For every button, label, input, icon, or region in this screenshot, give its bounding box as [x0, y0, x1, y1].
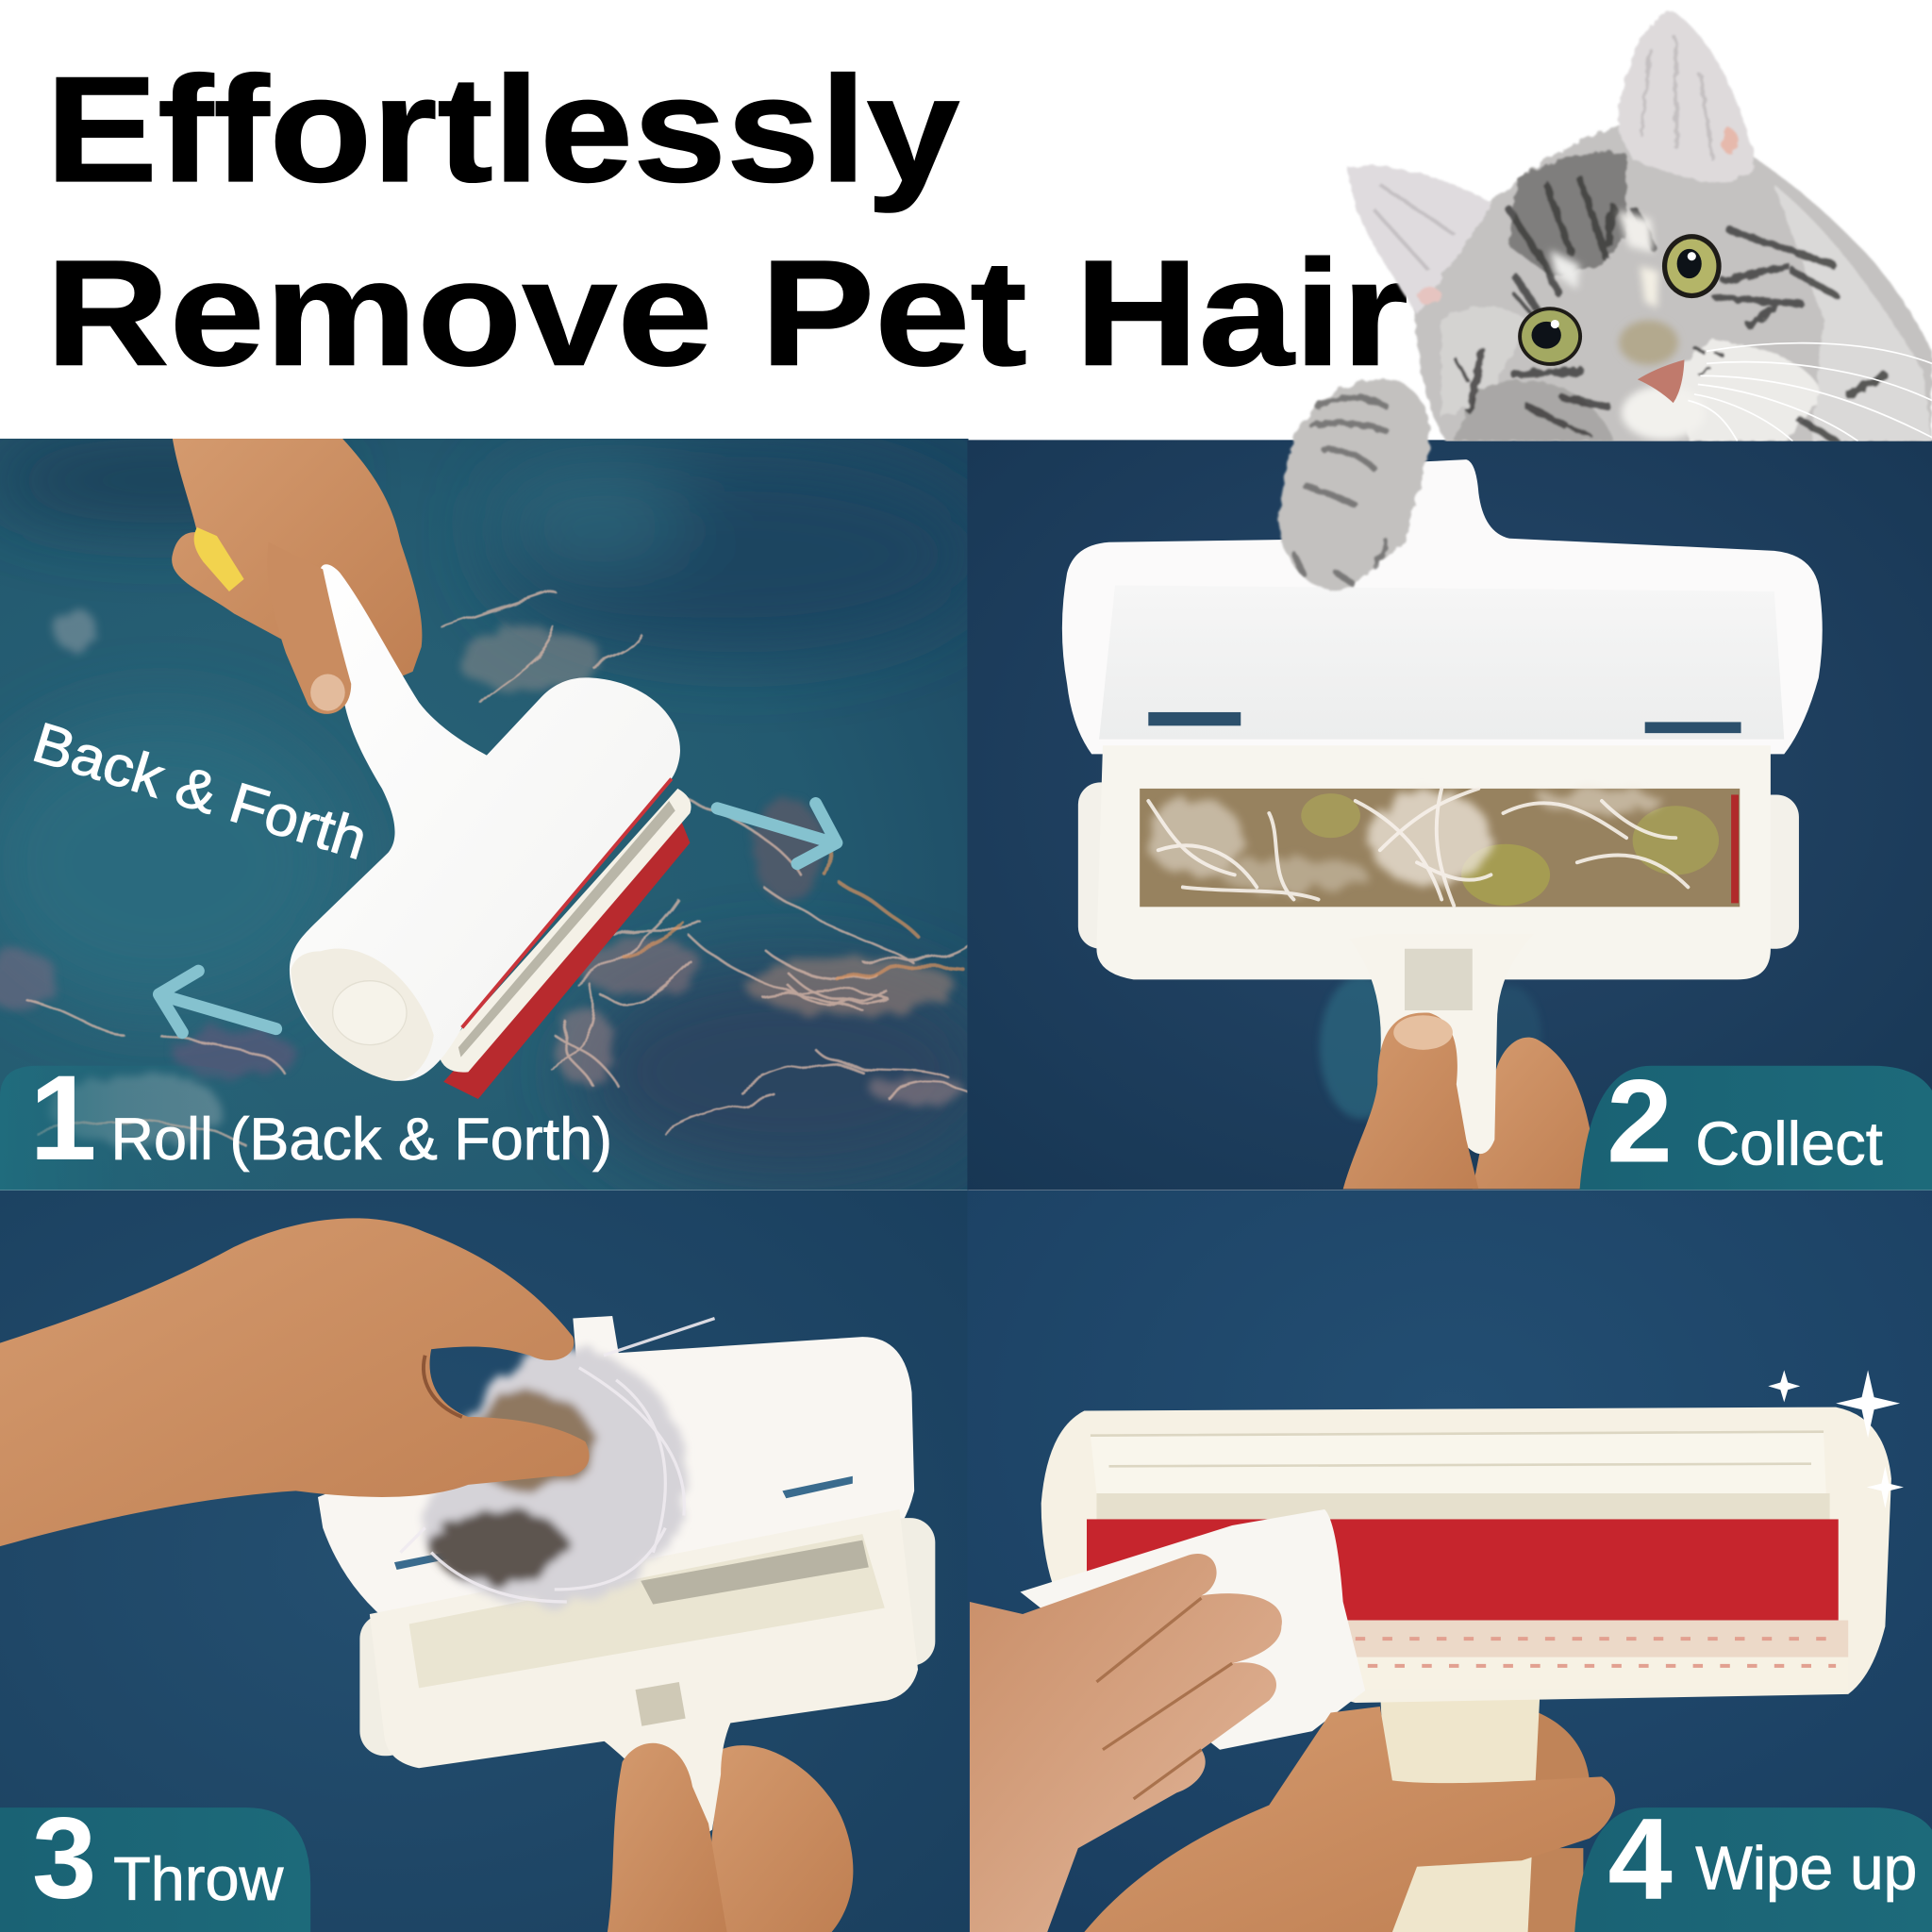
badge: step 3: Throw	[113, 1844, 284, 1913]
hand: back fingers behind handle	[1478, 1707, 1590, 1932]
arrow: left	[158, 971, 276, 1033]
badge: step 2	[1579, 1055, 1932, 1191]
cat ears	[1348, 9, 1755, 314]
badge: step 4	[1574, 1795, 1932, 1932]
hand: fingers behind handle	[702, 1745, 853, 1932]
arrow: right	[717, 804, 837, 864]
fabric shading	[0, 438, 998, 1183]
cat illustration	[1279, 9, 1932, 591]
red fabric strip	[1087, 1519, 1839, 1621]
badge: step 2: 2	[1607, 1055, 1673, 1188]
panel: step 4 wipe up	[967, 1191, 1932, 1932]
collected hair window	[1140, 789, 1740, 907]
badge: step 1: Roll (Back & Forth)	[111, 1107, 612, 1173]
cat paw	[1279, 379, 1429, 591]
badge: step 1: 1	[29, 1051, 97, 1186]
roller tray	[1096, 745, 1771, 979]
badge: step 3	[0, 1793, 310, 1932]
panel: step 3 throw	[0, 1191, 969, 1932]
badge: step 4: Wipe up	[1695, 1833, 1917, 1902]
roller handle	[1380, 1688, 1541, 1932]
hand: wiping fingers	[970, 1554, 1282, 1932]
roller: white handle and barrel	[290, 564, 680, 1081]
roller: red base and plate	[439, 789, 691, 1099]
roller handle	[1349, 934, 1534, 1154]
hand: thumb holding handle	[1084, 1707, 1615, 1932]
hair ball	[400, 1319, 715, 1605]
roller lid open	[1062, 459, 1823, 754]
roller frame	[1041, 1407, 1891, 1703]
panel: step 2 collect	[967, 440, 1932, 1191]
cat nose	[1638, 359, 1684, 403]
badge: step 4: 4	[1607, 1795, 1673, 1924]
cat muzzle and forehead highlight	[1550, 210, 1706, 440]
hand: hand gripping handle	[172, 439, 422, 690]
title	[45, 45, 1408, 397]
title: Remove Pet Hair	[45, 229, 1408, 397]
hand: upper hand pinching hair	[0, 1218, 590, 1546]
tissue wipe	[1020, 1509, 1365, 1750]
roller lid	[318, 1316, 914, 1626]
badge: step 1	[0, 1066, 609, 1191]
cat head	[1348, 9, 1932, 443]
panel: step 1 roll back and forth	[0, 438, 998, 1191]
title: Effortlessly	[45, 45, 959, 213]
roller end caps	[1078, 782, 1799, 949]
lower lint strip	[1343, 1621, 1848, 1690]
hand: thumb over handle	[1343, 1012, 1478, 1189]
badge: step 2: Collect	[1695, 1108, 1883, 1177]
cat whiskers	[1688, 343, 1932, 441]
label: back and forth: Back & Forth	[26, 710, 375, 872]
cat eyes	[1518, 234, 1722, 366]
badge: step 3: 3	[32, 1793, 96, 1923]
cat fur shading and tabby stripes	[1441, 153, 1932, 441]
sparkles	[1768, 1370, 1904, 1508]
hand: index finger over handle	[281, 568, 351, 714]
pet hair clumps on fabric	[0, 591, 967, 1146]
hand: fingers behind handle	[1473, 1038, 1605, 1189]
roller tray and caps	[359, 1509, 935, 1833]
hand: thumb holding handle	[608, 1743, 727, 1932]
